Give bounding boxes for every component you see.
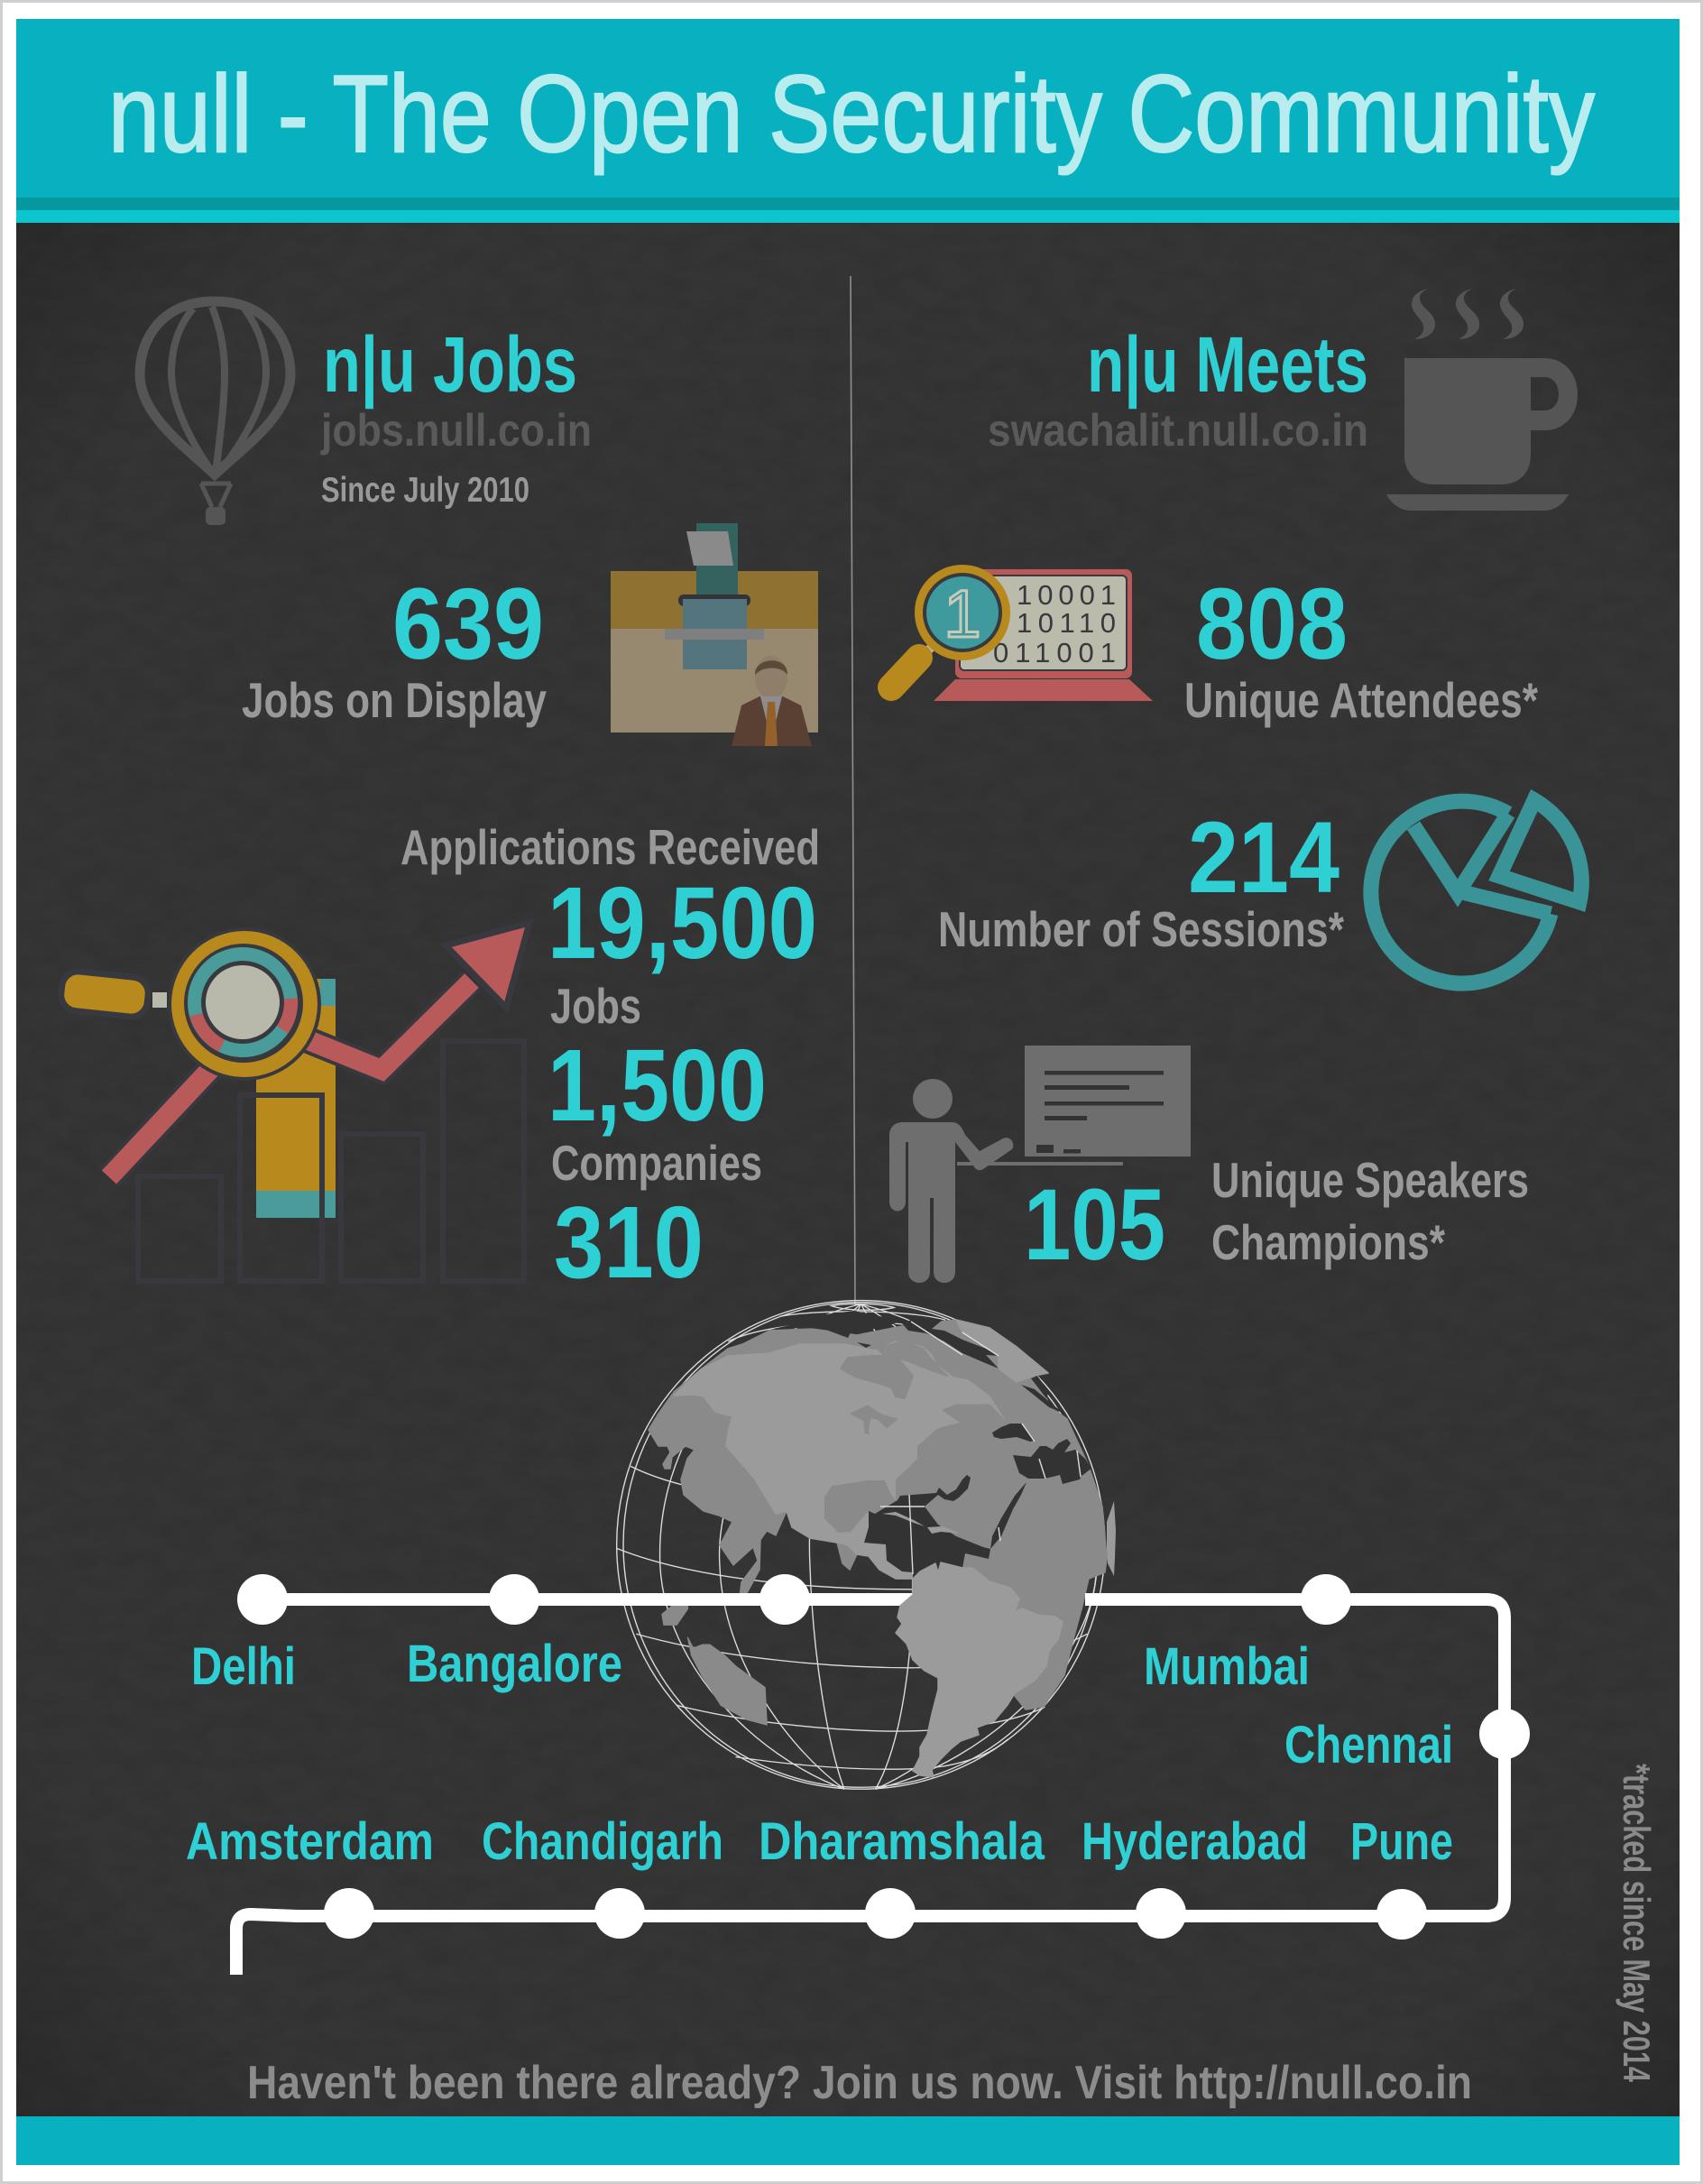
land: arctic islands	[878, 1341, 947, 1376]
center divider line	[851, 276, 855, 1306]
magnifier	[60, 927, 321, 1081]
route stops	[237, 1574, 1530, 1940]
city labels: Chennai	[1284, 1716, 1453, 1774]
label: number of sessions: Number of Sessions*	[938, 901, 1344, 957]
text: since july 2010: Since July 2010	[321, 471, 529, 510]
land: back australia and indonesia	[662, 1602, 767, 1725]
text: jobs url: jobs.null.co.in	[320, 405, 592, 456]
man	[732, 656, 812, 746]
city labels: Dharamshala	[759, 1812, 1045, 1871]
icon: search chart with arrow	[60, 923, 529, 1281]
land: great lakes	[851, 1405, 898, 1433]
stat: 214: 214	[1188, 801, 1339, 914]
label: jobs on display: Jobs on Display	[242, 672, 547, 728]
icon: coffee cup	[1386, 289, 1578, 511]
label: jobs: Jobs	[550, 978, 641, 1034]
grid over seas	[880, 1322, 1081, 1574]
label: unique attendees: Unique Attendees*	[1184, 672, 1538, 728]
city labels: Bangalore	[407, 1635, 622, 1693]
city labels: Amsterdam	[186, 1812, 434, 1871]
outlined bars	[138, 1041, 524, 1281]
city labels: Hyderabad	[1082, 1812, 1308, 1871]
land: hudson bay	[841, 1356, 913, 1398]
text: meets url: swachalit.null.co.in	[988, 405, 1368, 456]
land: northern light strip	[956, 1320, 1048, 1382]
seas: red sea	[990, 1482, 1026, 1549]
city labels: Delhi	[191, 1637, 296, 1696]
label: companies: Companies	[551, 1135, 762, 1191]
city labels: Chandigarh	[482, 1812, 723, 1871]
stat: 639: 639	[392, 567, 544, 680]
stat: 808: 808	[1196, 567, 1348, 680]
land: east coast darker	[896, 1405, 1019, 1500]
steam	[1412, 289, 1523, 339]
binary digits: 10110	[1017, 607, 1116, 639]
icon: presenter with board	[889, 1046, 1191, 1283]
city labels	[186, 1635, 1453, 1871]
header banner	[16, 19, 1680, 223]
icon: hot air balloon	[140, 301, 290, 525]
globe: grid lines	[617, 1301, 1105, 1789]
land: north america, light	[674, 1341, 1004, 1579]
label: applications received: Applications Received	[400, 819, 820, 875]
icon: pie chart	[1371, 800, 1581, 983]
land: south america over route	[896, 1562, 1063, 1777]
call to action: Haven't been there already? Join us now. Visit http://null.co.in	[247, 2057, 1472, 2109]
ochre bar	[256, 979, 336, 1218]
heading: n|u Jobs: n|u Jobs	[323, 321, 577, 410]
land: cuba and hispaniola	[882, 1512, 961, 1534]
binary digits: 011001	[993, 637, 1116, 668]
label: champions: Champions*	[1211, 1214, 1445, 1270]
land: madagascar sliver	[1107, 1501, 1116, 1576]
land: east patch	[943, 1405, 990, 1423]
seas: mediterranean	[1013, 1439, 1091, 1484]
magnifier: 1	[944, 576, 981, 651]
land: darker base silhouette	[649, 1320, 1107, 1709]
trend arrow	[109, 923, 529, 1177]
globe: land masses	[649, 1311, 1116, 1725]
icon: job seeker with printer	[611, 523, 818, 746]
city labels: Mumbai	[1144, 1637, 1310, 1696]
magnifier	[891, 565, 1010, 687]
stat: 19,500: 19,500	[548, 866, 817, 980]
land: gulf region	[825, 1481, 896, 1532]
icon: laptop with magnifier	[891, 565, 1153, 701]
city labels: Pune	[1350, 1812, 1453, 1871]
binary digits: 10001	[1017, 579, 1116, 611]
footer band	[16, 2116, 1680, 2165]
stat: 1,500: 1,500	[548, 1028, 767, 1142]
stat: 105: 105	[1024, 1168, 1165, 1281]
seas: caribbean	[864, 1475, 990, 1579]
metro route line	[236, 1574, 1530, 1975]
binary digits	[993, 579, 1116, 668]
stat: 310: 310	[554, 1185, 704, 1299]
label: unique speakers: Unique Speakers	[1211, 1152, 1529, 1208]
seas: black sea	[992, 1424, 1035, 1442]
heading: n|u Meets: n|u Meets	[1087, 321, 1368, 410]
seas: polar gaps	[902, 1319, 999, 1368]
